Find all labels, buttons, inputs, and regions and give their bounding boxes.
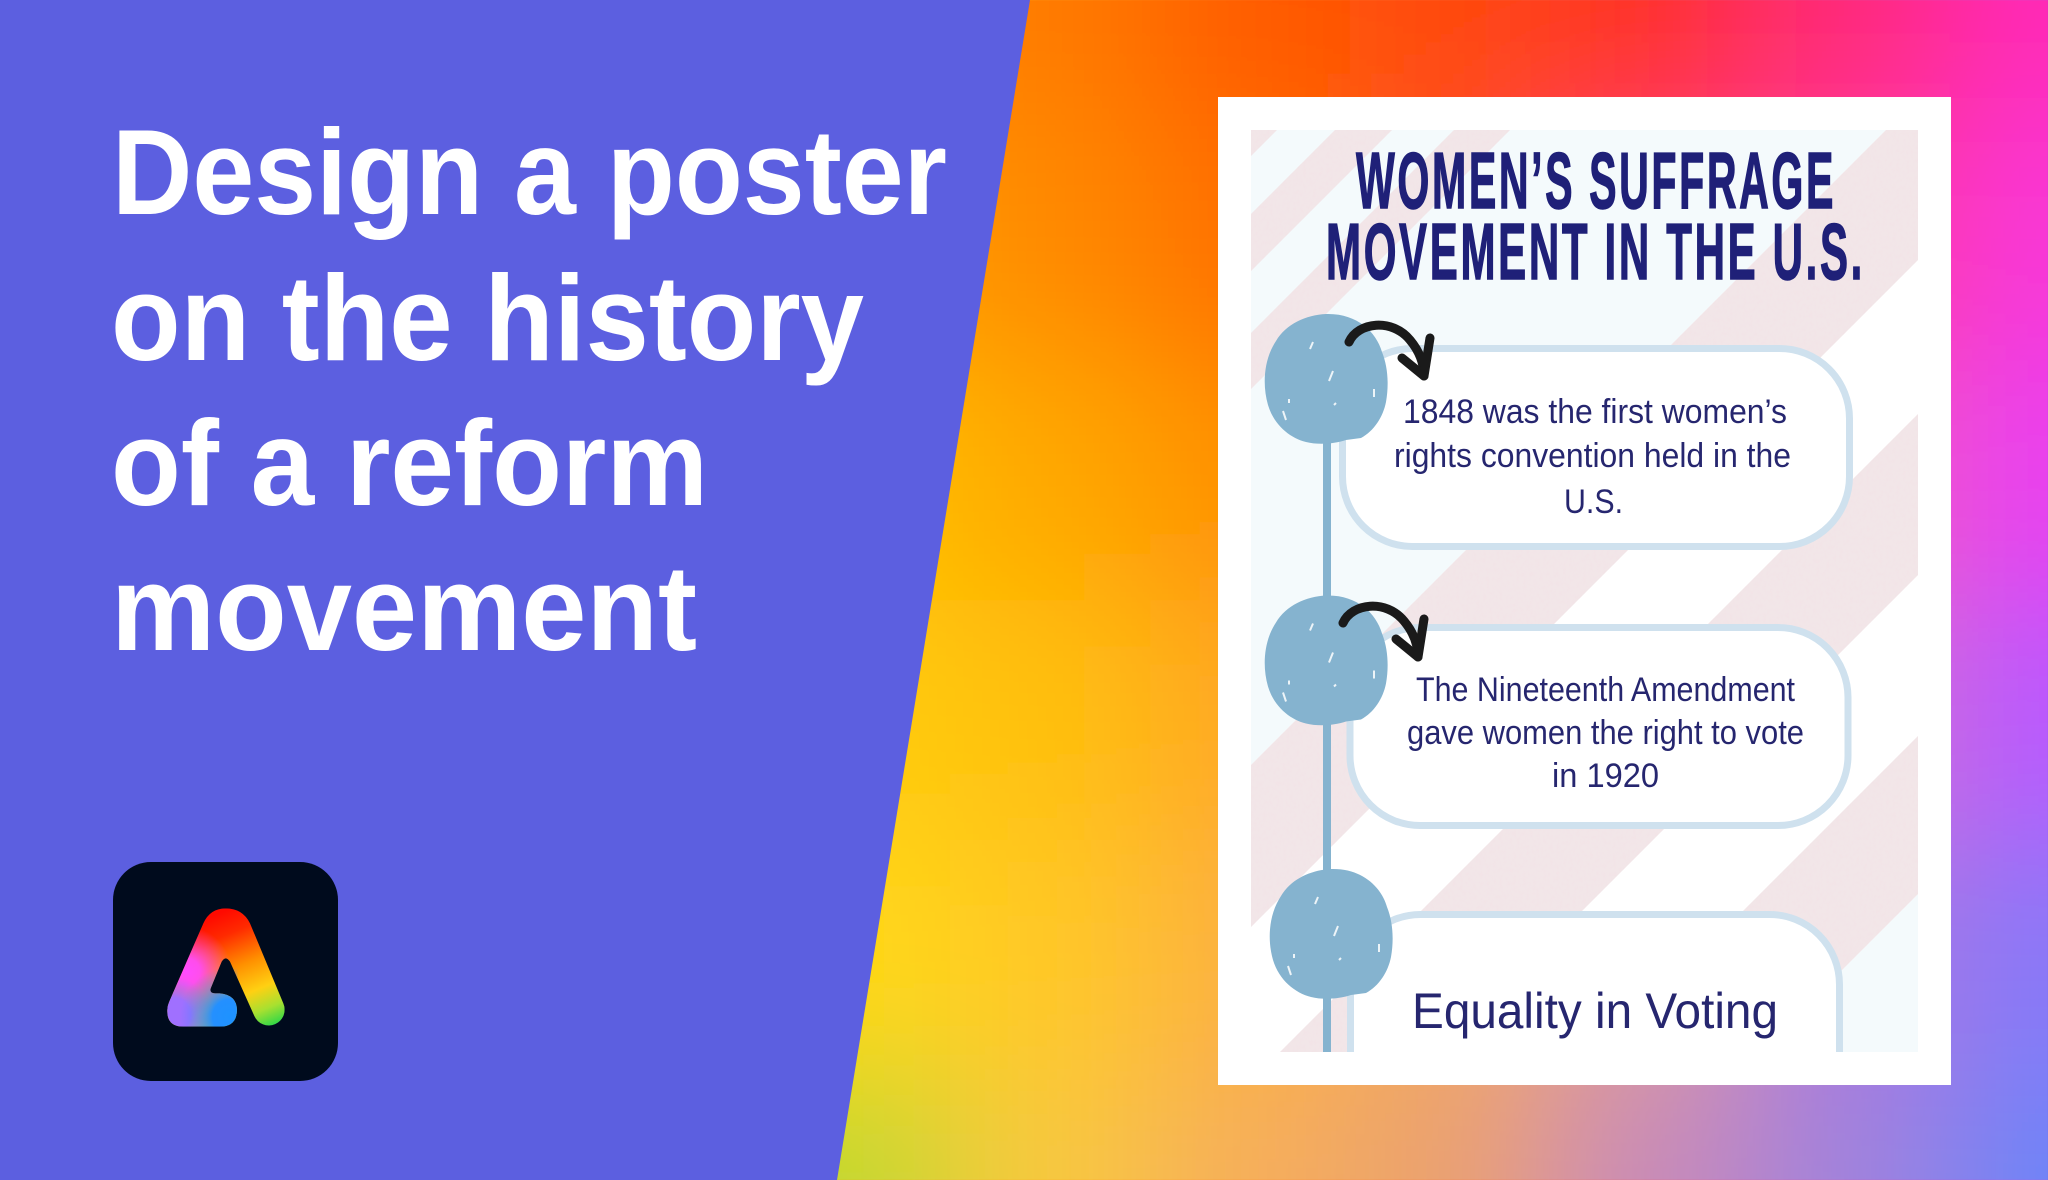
text: box 1 — [1394, 393, 1791, 521]
timeline vertical line — [1323, 430, 1331, 1052]
heading: on the history — [111, 250, 864, 386]
text: box 2: The Nineteenth Amendment — [1416, 671, 1795, 709]
text: box 2 — [1407, 671, 1804, 795]
text: box 1: 1848 was the first women’s — [1403, 393, 1787, 431]
timeline box 1 — [1342, 348, 1850, 546]
timeline box 2 — [1350, 628, 1848, 826]
text: box 2: in 1920 — [1552, 757, 1659, 795]
heading: of a reform — [111, 395, 708, 531]
text: box 1: rights convention held in the — [1394, 437, 1791, 475]
timeline dot 1 — [1265, 314, 1388, 444]
poster striped background — [1251, 130, 1918, 1052]
purple slanted panel — [0, 0, 1030, 1180]
poster card — [1218, 97, 1951, 1085]
icon: Adobe Express logo — [113, 862, 338, 1081]
text: box 1: U.S. — [1564, 483, 1623, 521]
arrow 1 — [1349, 325, 1430, 376]
timeline dot 3 — [1270, 869, 1393, 999]
text: box 3: Equality in Voting — [1412, 983, 1778, 1039]
arrow 2 — [1343, 606, 1424, 657]
heading: Design a poster — [112, 104, 947, 240]
heading: movement — [111, 540, 697, 676]
timeline box 3 — [1350, 914, 1840, 1052]
poster title — [1326, 136, 1865, 296]
timeline dot 2 — [1265, 595, 1388, 725]
text: box 2: gave women the right to vote — [1407, 714, 1804, 752]
heading — [111, 104, 947, 676]
